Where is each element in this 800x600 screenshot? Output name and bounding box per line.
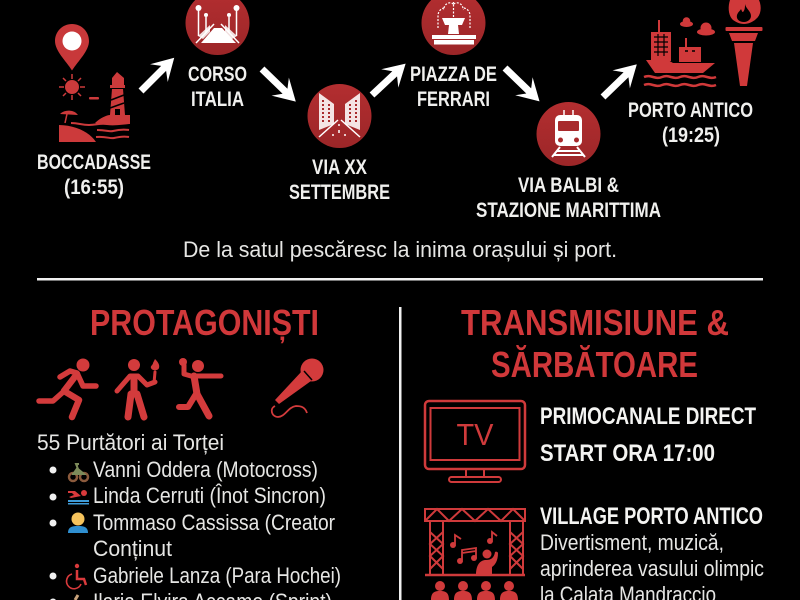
icon: train circle xyxy=(536,102,600,166)
item: Gabriele Lanza: Gabriele Lanza (Para Hochei) xyxy=(93,563,341,588)
label: Corso: CORSO xyxy=(188,63,247,86)
label: Ferrari: FERRARI xyxy=(417,88,490,111)
label: Italia: ITALIA xyxy=(191,88,244,111)
icon: microphone xyxy=(272,358,324,417)
intro line: 55 Purtători ai Torței xyxy=(37,430,224,455)
stop: Via XX Settembre xyxy=(289,84,390,204)
arrow 5 xyxy=(594,55,645,106)
text: start time: START ORA 17:00 xyxy=(540,440,715,467)
caption: De la satul pescăresc la inima orașului și port. xyxy=(183,237,617,262)
panel: protagonists xyxy=(37,302,341,600)
icon: beach and lighthouse xyxy=(59,72,130,142)
text: description line 2: aprinderea vasului olimpic xyxy=(540,556,764,581)
icon: runner xyxy=(39,358,96,417)
icon: television xyxy=(425,401,525,482)
arrow 4 xyxy=(496,59,548,110)
icon: map pin xyxy=(55,24,89,70)
label: Settembre: SETTEMBRE xyxy=(289,181,390,204)
stop: Porto Antico xyxy=(628,0,762,147)
icon: street circle xyxy=(308,84,372,148)
time: 16:55: (16:55) xyxy=(64,176,124,199)
icon: concert stage xyxy=(425,509,525,600)
heading: Transmisiune: TRANSMISIUNE & xyxy=(461,302,729,343)
time: 19:25: (19:25) xyxy=(662,124,720,147)
label: Via Balbi: VIA BALBI & xyxy=(518,174,619,197)
label: Piazza de: PIAZZA DE xyxy=(410,63,497,86)
icon: promenade circle xyxy=(186,0,250,55)
icon: ship and harbour xyxy=(644,17,716,86)
icon: television: TV xyxy=(456,417,494,452)
horizontal divider xyxy=(37,278,763,280)
text: description line 1: Divertisment, muzică, xyxy=(540,530,724,555)
torchbearer list xyxy=(50,457,341,600)
panel: broadcast and celebration xyxy=(425,302,764,600)
arrow 3 xyxy=(363,54,414,104)
stop: Corso Italia xyxy=(186,0,250,111)
label: Via XX: VIA XX xyxy=(312,156,367,179)
stop: Via Balbi and Stazione Marittima xyxy=(476,102,661,222)
vertical divider xyxy=(399,307,402,600)
item: Tommaso Cassissa: Conținut xyxy=(93,536,172,561)
arrow 1 xyxy=(132,49,183,100)
item: Tommaso Cassissa: Tommaso Cassissa (Creator xyxy=(93,510,335,535)
heading: Protagoniști: PROTAGONIȘTI xyxy=(90,302,319,343)
arrow 2 xyxy=(253,60,304,111)
stop: Boccadasse xyxy=(37,24,151,199)
heading: Sărbătoare: SĂRBĂTOARE xyxy=(491,344,698,385)
icon: olympic torch xyxy=(726,0,762,86)
item: Tommaso Cassissa xyxy=(50,510,335,561)
label: Boccadasse: BOCCADASSE xyxy=(37,151,151,174)
icon: torch bearer xyxy=(117,359,159,417)
icon: fountain circle xyxy=(422,0,486,55)
item: Vanni Oddera: Vanni Oddera (Motocross) xyxy=(93,457,318,482)
item: Linda Cerruti: Linda Cerruti (Înot Sincron) xyxy=(93,483,326,508)
label: Stazione Marittima: STAZIONE MARITTIMA xyxy=(476,199,661,222)
icon: athlete xyxy=(179,358,221,416)
label: Porto Antico: PORTO ANTICO xyxy=(628,99,753,122)
stop: Piazza De Ferrari xyxy=(410,0,497,111)
